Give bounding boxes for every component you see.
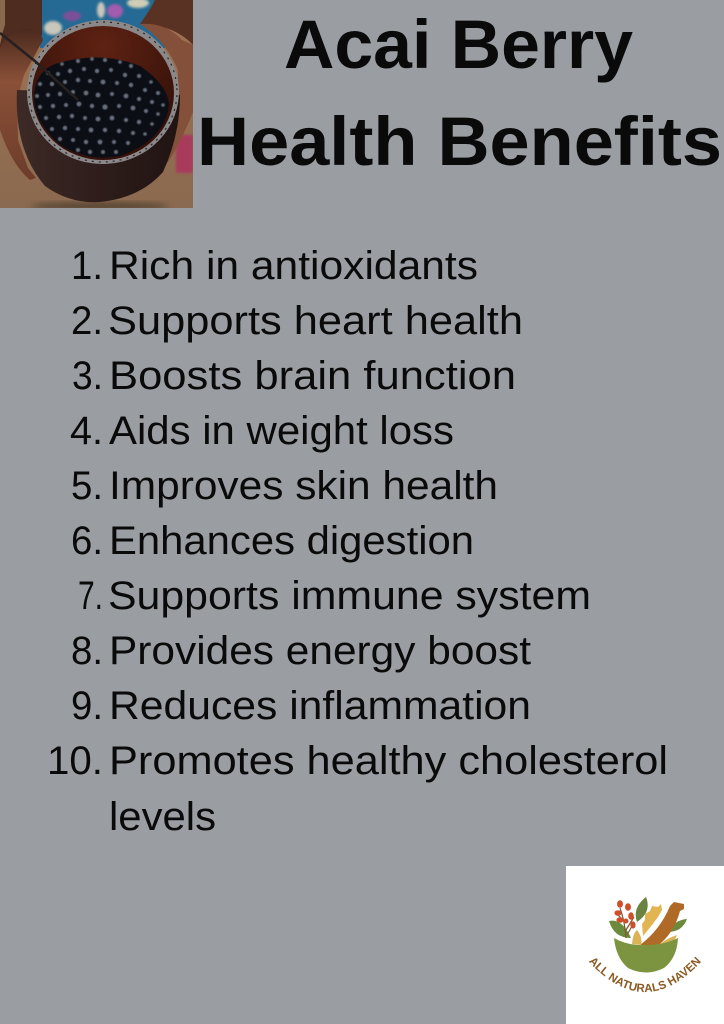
title line 1: Acai Berry bbox=[284, 6, 633, 83]
item 4: Aids in weight loss bbox=[109, 409, 454, 453]
item 7: Supports immune system bbox=[108, 574, 591, 618]
item 10 bbox=[47, 739, 668, 839]
item 2: Supports heart health bbox=[108, 299, 523, 343]
item 8: Provides energy boost bbox=[109, 629, 531, 673]
icon: leaves behind bowl bbox=[609, 897, 687, 938]
icon: wheat bbox=[642, 904, 662, 936]
item 3: 3. bbox=[72, 354, 103, 398]
icon: yellow herbs bbox=[632, 930, 677, 945]
item 3: Boosts brain function bbox=[109, 354, 516, 398]
icon: red berry sprig bbox=[614, 900, 636, 938]
bowl body bbox=[17, 90, 180, 202]
spoon handle bbox=[0, 33, 78, 100]
item 1: Rich in antioxidants bbox=[109, 244, 478, 288]
benefits list bbox=[47, 244, 668, 839]
item 9: 9. bbox=[71, 684, 103, 728]
logo white panel bbox=[566, 866, 724, 1024]
item 2: 2. bbox=[71, 299, 103, 343]
icon: pestle bbox=[640, 902, 684, 947]
item 6: 6. bbox=[71, 519, 103, 563]
item 4: 4. bbox=[70, 409, 103, 453]
item 8: 8. bbox=[71, 629, 103, 673]
bowl inner wood bbox=[32, 26, 174, 160]
photo backdrop: fabric and ground bbox=[0, 0, 193, 210]
title bbox=[197, 6, 722, 180]
left arm and hand bbox=[0, 0, 42, 48]
icon: green mortar bowl bbox=[614, 938, 678, 972]
logo text: ALL NATURALS HAVEN bbox=[588, 956, 701, 992]
logo: All Naturals Haven bbox=[566, 866, 724, 1024]
item 5: Improves skin health bbox=[109, 464, 498, 508]
item 1: 1. bbox=[71, 244, 103, 288]
item 10: 10. bbox=[47, 739, 103, 783]
item 9: Reduces inflammation bbox=[109, 684, 531, 728]
item 6: Enhances digestion bbox=[109, 519, 474, 563]
item 5: 5. bbox=[71, 464, 103, 508]
item 7: 7. bbox=[78, 574, 103, 618]
right arm and hand bbox=[140, 0, 193, 45]
item 10: Promotes healthy cholesterol bbox=[109, 739, 668, 783]
item 10: levels bbox=[109, 795, 216, 839]
berries bbox=[34, 57, 169, 158]
bowl rim bbox=[23, 16, 183, 168]
title line 2: Health Benefits bbox=[197, 103, 722, 180]
photo: hands holding a bowl of acai berries bbox=[0, 0, 193, 210]
bowl rim speckle bbox=[25, 18, 181, 166]
